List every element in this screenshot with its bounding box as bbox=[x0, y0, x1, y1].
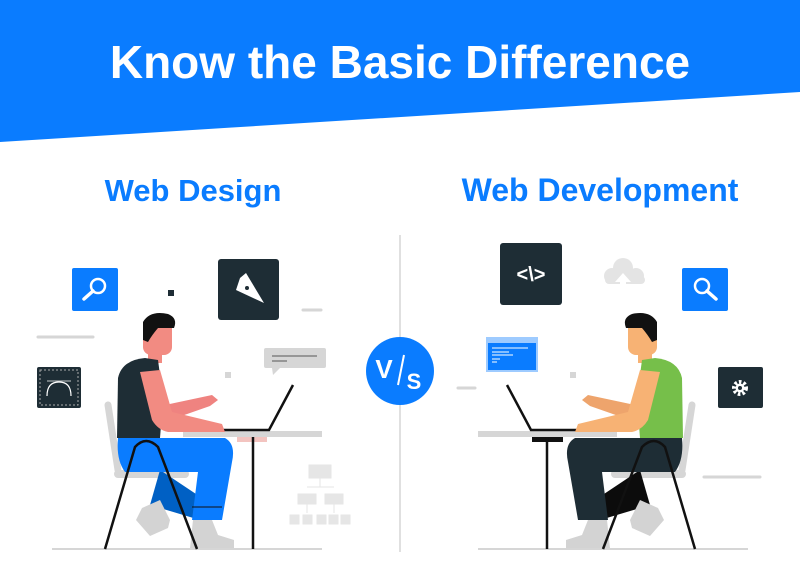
heading: Web Design: Web Design bbox=[105, 173, 281, 208]
vs badge bbox=[366, 337, 434, 405]
icon: bezier box bbox=[37, 367, 81, 408]
icon: sitemap bbox=[290, 465, 350, 524]
person: web developer bbox=[566, 313, 695, 549]
floor lines bbox=[52, 548, 322, 550]
icon: search (left) bbox=[72, 268, 118, 311]
person: web designer bbox=[105, 313, 234, 549]
vs badge: V bbox=[375, 354, 393, 384]
vs badge: S bbox=[407, 369, 421, 394]
desk right bbox=[478, 385, 617, 549]
heading: Web Development: Web Development bbox=[462, 172, 739, 208]
title: Know the Basic Difference bbox=[110, 36, 690, 88]
icon: pen tool bbox=[218, 259, 279, 320]
icon: cloud bbox=[604, 258, 645, 290]
icon: speech bubble bbox=[264, 348, 326, 375]
desk left bbox=[183, 385, 322, 549]
icon: search (right) bbox=[682, 268, 728, 311]
icon: code bbox=[500, 243, 562, 305]
icon: gear bbox=[718, 367, 763, 408]
decorative lines left bbox=[38, 310, 760, 477]
icon: code: <\> bbox=[517, 264, 545, 286]
icon: browser window bbox=[486, 337, 538, 372]
header banner bbox=[0, 0, 800, 142]
